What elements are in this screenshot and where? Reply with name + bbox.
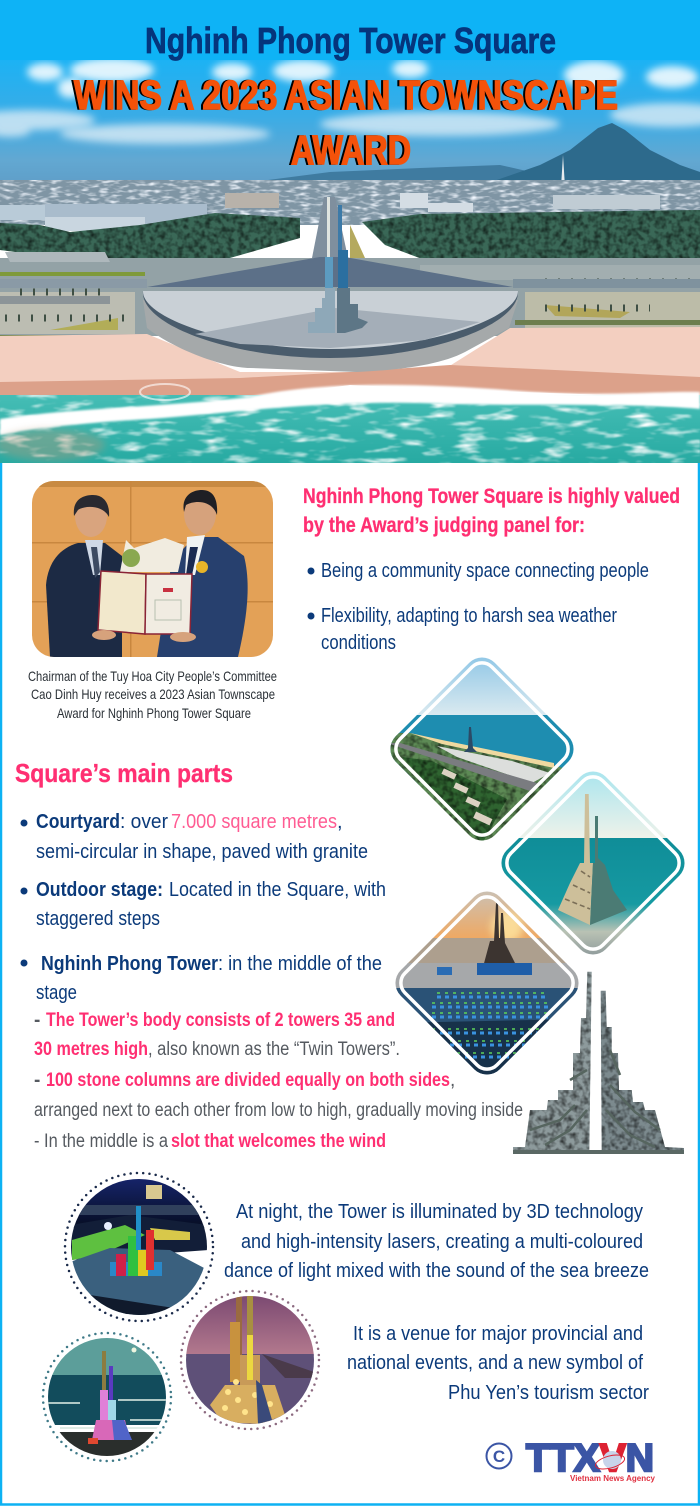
heading: Square's main parts: Square’s main parts [15, 758, 233, 788]
list item: Courtyard: , [337, 811, 343, 833]
logo: Vietnam News Agency: Vietnam News Agency [570, 1473, 655, 1483]
judging panel bullet list [308, 560, 649, 654]
avenue [312, 197, 348, 258]
city [0, 180, 700, 225]
text: night illumination: and high-intensity lasers, creating a multi-coloured [241, 1231, 643, 1253]
certificate [98, 571, 146, 634]
text: venue and tourism symbol: national events, and a new symbol of [347, 1352, 643, 1374]
list item: Nghinh Phong Tower: : in the middle of the [218, 953, 382, 975]
diamond photo: tower by the sea [498, 768, 688, 958]
judging panel bullet list: Flexibility, adapting to harsh sea weather [321, 605, 617, 627]
subtitle: wins a 2023 Asian Townscape Award: AWARD [291, 127, 411, 173]
title line: Nghinh Phong Tower Square: Nghinh Phong Tower Square [145, 20, 556, 61]
logo: Vietnam News Agency: TTXVN [526, 1437, 654, 1480]
tower details: - [34, 1010, 40, 1031]
courtyard wall and surface [143, 300, 518, 372]
trees [0, 210, 700, 258]
judging panel heading [303, 485, 680, 537]
tower details: arranged next to each other from low to high, gradually moving inside [34, 1100, 523, 1121]
logo: Vietnam News Agency: C [493, 1447, 505, 1466]
text: venue and tourism symbol: It is a venue for major provincial and [353, 1323, 643, 1345]
tower cutout [513, 972, 684, 1154]
diamond photo: stage at sunset [392, 888, 582, 1078]
tower details: 30 metres high [34, 1039, 148, 1060]
road plaza [147, 257, 513, 287]
text: venue and tourism symbol: Phu Yen’s tourism sector [448, 1382, 649, 1404]
tower details: - In the middle is a [34, 1131, 168, 1152]
hero photo: aerial view of Nghinh Phong Tower Square [0, 58, 700, 463]
tower details: - [34, 1070, 40, 1091]
judging panel heading: by the Award’s judging panel for: [303, 514, 585, 537]
left man [46, 543, 122, 657]
title [74, 20, 618, 173]
list item: Courtyard: : over [120, 811, 168, 833]
circle photo: tower with pink and violet lights [43, 1333, 171, 1461]
ground [0, 258, 700, 336]
judging panel bullet list: conditions [321, 632, 396, 654]
surf and water [0, 395, 700, 463]
hands [92, 630, 116, 640]
diamond photo: aerial coastline [387, 654, 577, 844]
tower details: , also known as the “Twin Towers”. [148, 1039, 400, 1060]
list item: Nghinh Phong Tower: Nghinh Phong Tower [41, 953, 218, 975]
palms [5, 282, 690, 318]
subtitle: wins a 2023 Asian Townscape Award [74, 72, 618, 173]
list item: Outdoor stage: Located in the Square, with [169, 879, 386, 901]
right man [157, 537, 248, 657]
list item: Nghinh Phong Tower: stage [36, 982, 77, 1004]
page border [1, 463, 699, 1504]
list item: Outdoor stage: staggered steps [36, 908, 160, 930]
flowers [120, 538, 184, 572]
tower details: 100 stone columns are divided equally on both sides [46, 1070, 450, 1091]
tower details: slot that welcomes the wind [171, 1131, 386, 1152]
list item: Outdoor stage: Outdoor stage: [36, 879, 163, 901]
text: venue and tourism symbol [347, 1323, 649, 1404]
list item: Courtyard [20, 811, 368, 863]
photo caption: Chairman of the Tuy Hoa City People’s Committee [28, 668, 277, 684]
photo caption: Award for Nghinh Phong Tower Square [57, 705, 251, 721]
tower details: , [450, 1070, 455, 1091]
list item: Outdoor stage [20, 879, 386, 930]
list item: Courtyard: Courtyard [36, 811, 120, 833]
beach [0, 327, 700, 382]
list item: Nghinh Phong Tower [20, 953, 382, 1004]
text: night illumination [224, 1201, 649, 1282]
header band [0, 0, 700, 60]
text: night illumination: At night, the Tower is illuminated by 3D technology [236, 1201, 643, 1223]
tower details [34, 1010, 523, 1152]
list item: Courtyard: 7.000 square metres [171, 811, 337, 833]
hero tower [308, 205, 368, 333]
text: night illumination: dance of light mixed with the sound of the sea breeze [224, 1260, 649, 1282]
photo caption: Cao Dinh Huy receives a 2023 Asian Townscape [31, 686, 275, 702]
circle photo: tower at night with multicoloured lights [65, 1173, 213, 1321]
photo: award presentation [32, 481, 273, 657]
tower details: The Tower’s body consists of 2 towers 35 and [46, 1010, 395, 1031]
photo caption [28, 668, 277, 721]
list item: Courtyard: semi-circular in shape, paved with granite [36, 841, 368, 863]
circle photo: tower at dusk with golden lights [181, 1291, 319, 1429]
